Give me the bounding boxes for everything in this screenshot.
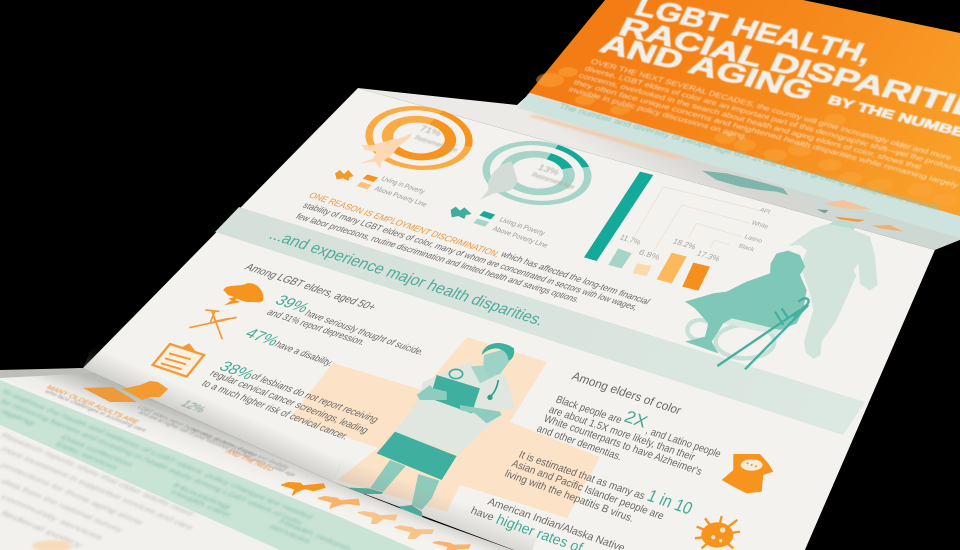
text block: employment discrimination: ONE REASON IS EMPLOYMENT DISCRIMINATION, xyxy=(306,191,502,259)
panel: folded strip behind page xyxy=(358,88,960,250)
flap small text xyxy=(42,384,297,478)
seat xyxy=(723,317,780,335)
flap green band: Health care xyxy=(169,489,234,518)
stat: 47% xyxy=(241,325,336,368)
body xyxy=(685,251,807,353)
blurred orange blocks xyxy=(817,200,903,232)
flap green band: Elder services xyxy=(54,441,120,471)
bar: Latino xyxy=(657,253,687,283)
icon: virus xyxy=(695,516,740,548)
flap small text: MANY OLDER ADULTS ARE xyxy=(45,384,142,425)
text block: among LGBT elders: Among LGBT elders, aged 50+ xyxy=(242,261,379,313)
icons: right column xyxy=(695,454,773,548)
flap green band: by removing barriers and investing in health equity among LGBT elders of color xyxy=(0,398,306,526)
illustration: standing caregiver xyxy=(788,221,878,359)
person silhouette xyxy=(360,133,412,168)
flap lower white section: community services xyxy=(0,494,106,541)
flap lower white section: Research reports show that elder adults need xyxy=(0,432,196,517)
cover intro text: invisible in public policy discussions on aging. xyxy=(567,85,749,141)
stat: 47%: have a disability. xyxy=(272,340,336,368)
hair xyxy=(482,343,514,361)
legend: teal donut xyxy=(451,207,550,249)
bar category labels: API xyxy=(758,207,772,216)
icon: bottle xyxy=(122,381,168,400)
bar category labels xyxy=(737,207,772,253)
bar values: 18.2% xyxy=(671,236,698,251)
text block: among LGBT elders xyxy=(199,261,427,442)
legend: orange donut: Living in Poverty xyxy=(380,174,427,195)
person silhouette xyxy=(480,162,517,200)
bar: White xyxy=(633,263,652,276)
icon: head with speech bubble xyxy=(722,454,773,493)
stat: 47%: 47% xyxy=(241,325,284,349)
percent label xyxy=(413,124,459,154)
illustration: nurse xyxy=(348,343,515,519)
icon: clipboard xyxy=(153,343,204,377)
donut: orange xyxy=(351,96,487,180)
face xyxy=(483,348,509,377)
title xyxy=(595,0,960,146)
bar values xyxy=(618,232,722,263)
icon: storm cloud xyxy=(223,283,263,305)
cover intro text: OVER THE NEXT SEVERAL DECADES, the country will grow increasingly older and more xyxy=(589,57,953,162)
text block: employment discrimination: stability of many LGBT elders of color, many of whom are concentrated in sectors with low wages, xyxy=(300,201,640,312)
text block: employment discrimination xyxy=(293,191,652,312)
peach spot xyxy=(32,540,72,550)
decorative hexagon dots xyxy=(536,67,957,206)
percent label: 71% xyxy=(418,124,443,138)
text block: employment discrimination: which has affected the long-term financial xyxy=(497,250,652,307)
icon: orange house arrow xyxy=(83,387,137,402)
bar: all xyxy=(584,172,653,261)
text block: among elders of color: have xyxy=(469,505,496,523)
panel: front flap xyxy=(0,368,530,550)
bar category labels: White xyxy=(750,220,770,231)
blurred map xyxy=(702,171,788,195)
wheels xyxy=(687,320,774,358)
icon: hands xyxy=(451,207,472,219)
flap lower white section: federal policy xyxy=(0,510,87,549)
orange bird row xyxy=(282,483,470,550)
panel: main page xyxy=(83,88,935,550)
bar values: 17.3% xyxy=(695,248,722,263)
title: BY THE NUMBERS xyxy=(826,92,960,146)
text block: among elders of color: 1 in 10 xyxy=(644,485,696,518)
stat: 39% xyxy=(264,292,427,357)
bar: API xyxy=(608,248,632,268)
icons: left column xyxy=(153,283,263,377)
text block: among elders of color xyxy=(469,369,723,550)
legend: orange donut: Above Poverty Line xyxy=(373,184,429,208)
right edge black corner xyxy=(805,240,960,550)
flap small text: and are at higher risk of poor outcomes than their peers in older age xyxy=(137,410,297,478)
flap green band: Data collection xyxy=(59,434,135,468)
stat: 38%: regular cervical cancer screenings, leading xyxy=(207,369,371,436)
icon: crutches xyxy=(189,310,237,339)
text block: among elders of color: and other dementias. xyxy=(535,423,624,463)
bar values: 6.8% xyxy=(637,247,662,262)
donut: teal xyxy=(469,131,605,215)
band behind heading xyxy=(215,207,865,435)
bar: Black xyxy=(682,263,710,291)
stat: 39%: and 31% report depression. xyxy=(264,308,368,347)
flap lower white section: protections for those aging alone xyxy=(0,462,146,526)
bird 1 xyxy=(282,483,325,495)
legend: teal donut: Living in Poverty xyxy=(498,215,547,237)
text block: among elders of color: White counterparts to have Alzheimer's xyxy=(542,413,704,478)
skirt xyxy=(377,432,457,480)
fold shading on page xyxy=(83,346,540,550)
title: RACIAL DISPARITIES xyxy=(614,12,960,129)
blurred peach stripe xyxy=(528,115,688,159)
illustration: person in wheelchair xyxy=(685,251,809,369)
cover intro text: concerns, overlooked in the search about health and aging elders of color, shows that xyxy=(577,71,924,171)
text: 12% stat on flap: 12% xyxy=(178,398,210,415)
icon: hands xyxy=(335,170,354,181)
left hand xyxy=(417,385,447,400)
legend: orange donut xyxy=(335,170,429,208)
flap lower white section xyxy=(0,425,293,550)
cover intro text xyxy=(567,57,960,189)
stat: 38%: 38% xyxy=(215,358,259,383)
text block: among elders of color: living with the hepatitis B virus. xyxy=(503,468,636,525)
bird 5 xyxy=(433,542,470,550)
text block: among elders of color: It is estimated that as many as xyxy=(517,449,647,502)
panel: orange cover xyxy=(528,0,960,216)
bar chart xyxy=(584,172,772,291)
flap small text: AND THE NEED xyxy=(224,448,276,472)
bag xyxy=(430,375,480,413)
teal band with statement xyxy=(518,94,960,238)
text block: among elders of color: Among elders of color xyxy=(570,369,684,417)
bird 3 xyxy=(358,512,397,523)
text block: employment discrimination: few labor protections, routine discrimination and limited health and savings options. xyxy=(293,212,582,305)
flap small text: among people of color xyxy=(189,427,259,459)
heading: health disparities: ...and experience major health disparities. xyxy=(266,225,549,329)
percent label: 13% xyxy=(536,163,561,177)
text block: among elders of color: are about 1.5X more likely, than their xyxy=(547,404,697,463)
legs xyxy=(370,460,406,492)
flap small text: LGBT elders report higher rates of chronic disease and disability xyxy=(136,405,291,471)
stat: 39%: 39% xyxy=(271,292,314,316)
stat: 39%: have seriously thought of suicide. xyxy=(302,309,427,357)
text block: among elders of color: Black people are xyxy=(554,394,624,426)
bird 2 xyxy=(318,497,359,508)
text block: among elders of color: , and Latino people xyxy=(644,425,723,460)
text block: among elders of color: 2X xyxy=(621,406,651,431)
flap green band: Health reform xyxy=(277,518,354,550)
percent label: Retirement Age xyxy=(413,135,459,154)
crutches xyxy=(717,298,809,369)
flap small text: who face challenges in accessing care xyxy=(42,389,148,433)
coat xyxy=(395,362,515,455)
right shoe xyxy=(398,505,423,519)
bird 4 xyxy=(395,526,433,538)
bar category labels: Black xyxy=(737,243,756,253)
flap green band: Housing xyxy=(171,482,233,510)
flap lower white section: more investment in supportive services and care xyxy=(0,446,196,531)
right hand xyxy=(460,405,502,423)
bar category labels: Latino xyxy=(743,234,764,245)
legend: teal donut: Above Poverty Line xyxy=(491,224,550,249)
stethoscope xyxy=(490,380,498,397)
percent label: Retirement Age xyxy=(530,172,576,191)
percent label xyxy=(530,163,576,191)
flap green band: To improve the health and wellness of LGBT elders, policy changes are needed xyxy=(0,388,315,520)
stat: 38%: of lesbians do not report receiving xyxy=(248,372,381,425)
neck xyxy=(471,365,500,383)
stat: 38%: to a much higher risk of cervical cancer. xyxy=(199,379,351,442)
cover intro text: they often face unique concerns and heightened health disparities while remaining largely xyxy=(572,78,960,189)
cover intro text: diverse. LGBT elders of color are an important part of this demographic shift—yet the profound xyxy=(583,64,960,173)
stat: 38% xyxy=(199,358,381,442)
connector lines xyxy=(633,187,758,252)
flap lower white section: data from the national survey xyxy=(0,478,126,534)
text block: among elders of color: Asian and Pacific Islander people are xyxy=(510,458,666,522)
flap green band xyxy=(0,380,430,550)
flap green band: services xyxy=(267,523,313,544)
bar values: 11.7% xyxy=(618,232,643,247)
peach cross xyxy=(290,337,600,518)
teal band with statement: The number and diversity of people age 65+ in the U.S. is growing by leaps and bounds. xyxy=(557,101,944,213)
title: AND AGING xyxy=(595,29,818,106)
left shoe xyxy=(348,488,383,494)
